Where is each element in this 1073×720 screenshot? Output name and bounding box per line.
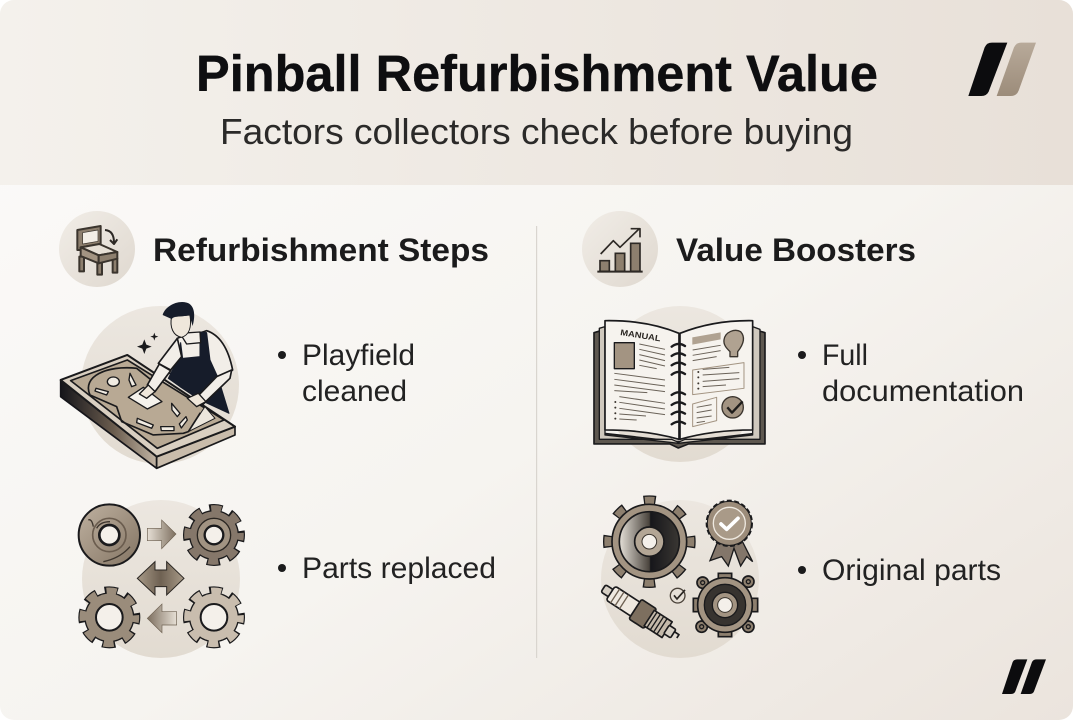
icon: spark plug xyxy=(597,579,684,646)
illustration: original parts xyxy=(597,500,759,658)
illustration: open manual xyxy=(594,306,765,462)
logo: header slashes xyxy=(968,43,1036,96)
icon: worn disc xyxy=(79,504,140,566)
icon: worn gear xyxy=(83,591,136,644)
bullet: full documentation: documentation xyxy=(822,375,1024,408)
icon: large original gear xyxy=(608,500,691,583)
bullet: playfield cleaned xyxy=(278,339,415,408)
heading: refurbishment steps: Refurbishment Steps xyxy=(153,232,489,268)
illustration: worker cleaning playfield xyxy=(61,302,239,468)
arrow: left xyxy=(147,604,177,633)
column divider xyxy=(536,226,537,658)
icon: check seal xyxy=(722,397,743,418)
panel: refurbishment steps xyxy=(59,211,496,658)
arrow: both ways xyxy=(137,562,184,595)
header band xyxy=(0,0,1073,185)
page background xyxy=(0,185,1073,720)
icon: light bulb xyxy=(724,330,743,357)
panel: value boosters xyxy=(582,211,1024,658)
icon: clean gear xyxy=(188,591,240,644)
title: Pinball Refurbishment Value xyxy=(196,45,878,102)
bullet: full documentation: Full xyxy=(822,339,868,372)
spiral binding xyxy=(672,344,685,424)
arrow: right xyxy=(147,520,176,549)
bullet: playfield cleaned: cleaned xyxy=(302,375,407,408)
worker xyxy=(128,302,233,413)
bullet: parts replaced: Parts replaced xyxy=(302,552,496,585)
bullet: playfield cleaned: Playfield xyxy=(302,339,415,372)
logo: footer slashes xyxy=(1002,659,1046,694)
icon: pinball machine xyxy=(59,211,135,287)
illustration: open manual: MANUAL xyxy=(620,327,661,343)
subtitle: Factors collectors check before buying xyxy=(220,111,853,152)
icon: rising chart xyxy=(582,211,658,287)
illustration: worn parts swapped for new xyxy=(79,500,240,658)
playfield parts xyxy=(95,373,187,431)
icon: small check xyxy=(670,588,685,603)
icon: award rosette xyxy=(707,501,753,566)
icon: small gear xyxy=(693,573,758,637)
heading: value boosters: Value Boosters xyxy=(676,232,916,268)
icon: new gear top xyxy=(188,509,240,561)
bullet: full documentation xyxy=(798,339,1024,408)
bullet: original parts: Original parts xyxy=(822,554,1001,587)
